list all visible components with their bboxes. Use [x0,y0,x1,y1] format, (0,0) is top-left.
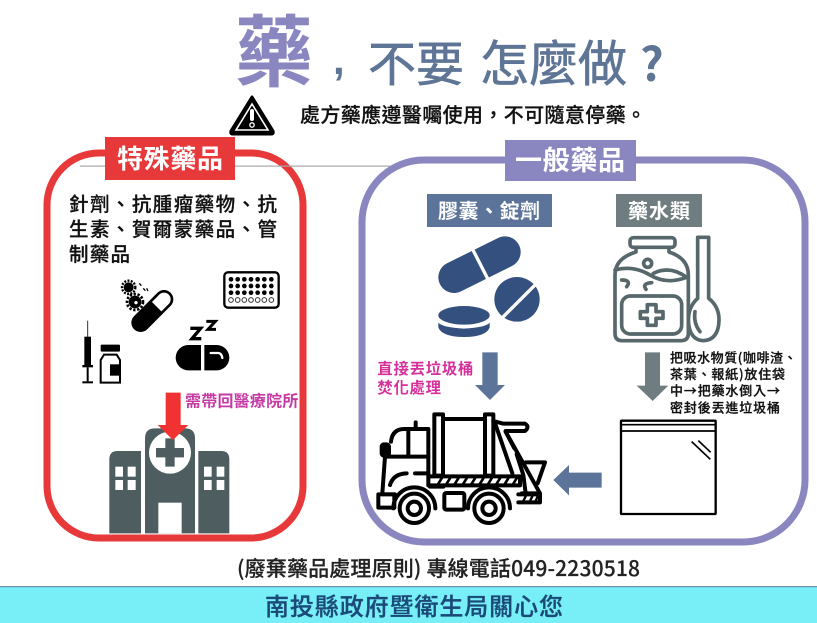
panel: special drugs [47,137,390,538]
heading: special drugs [105,137,235,180]
title: 不要 [368,39,464,92]
icons and hospital [82,272,298,533]
tablets disposal text: 焚化處理 [377,380,441,397]
icon: warning triangle [231,97,273,134]
syrup disposal text: 密封後丟進垃圾桶 [670,398,780,417]
icon: sleeping pill [176,321,229,370]
label: liquid medicine: 藥水類 [628,200,690,223]
title: 怎麼做 [480,38,627,92]
panel frame: red [47,153,303,538]
special drugs description: 生素、賀爾蒙藥品、管 [69,219,277,241]
arrow: to hospital [158,393,188,440]
heading: general drugs [505,140,636,181]
arrow: syrup to bag [637,352,668,401]
panel: general drugs [362,140,805,542]
footer bar: 南投縣政府暨衛生局關心您 [265,594,563,621]
title: , [333,36,345,83]
special drugs description [69,194,277,266]
arrow: tablets to truck [475,352,505,400]
icon: syringe and vial [82,321,120,383]
icon: pills [438,249,540,337]
icon: blister pack [224,272,279,308]
title: 藥 [235,9,313,97]
tablets disposal text [377,360,473,397]
label: capsules and tablets [427,194,552,227]
syrup disposal text [670,347,797,417]
warning text: 處方藥應遵醫囑使用，不可隨意停藥。 [300,103,646,127]
syrup disposal text: 茶葉、報紙)放住袋 [670,364,785,383]
heading: special drugs: 特殊藥品 [117,144,223,174]
special drugs description: 制藥品 [69,244,130,266]
icon: hospital [109,428,229,533]
heading: general drugs: 一般藥品 [515,146,625,176]
title [235,9,664,97]
label: capsules and tablets: 膠囊、錠劑 [438,199,540,223]
syrup disposal text: 把吸水物質(咖啡渣、 [670,347,797,366]
special drugs description: 針劑、抗腫瘤藥物、抗 [69,194,277,216]
icon: syrup bottle and spoon [615,237,719,341]
hospital destination label: 需帶回醫療院所 [185,392,298,411]
label: liquid medicine [616,194,702,227]
hotline text: (廢棄藥品處理原則) 專線電話049-2230518 [237,553,640,583]
tablets disposal text: 直接丟垃圾桶 [377,360,473,378]
title: ? [640,29,664,95]
panel frame: purple [362,160,805,542]
footer bar [0,586,817,623]
icon: capsule with viruses [122,281,164,323]
icon: sealed bag [621,421,716,514]
syrup disposal text: 中→把藥水倒入→ [670,381,780,400]
arrow: bag to truck [553,465,602,495]
icon: garbage truck [378,414,545,523]
